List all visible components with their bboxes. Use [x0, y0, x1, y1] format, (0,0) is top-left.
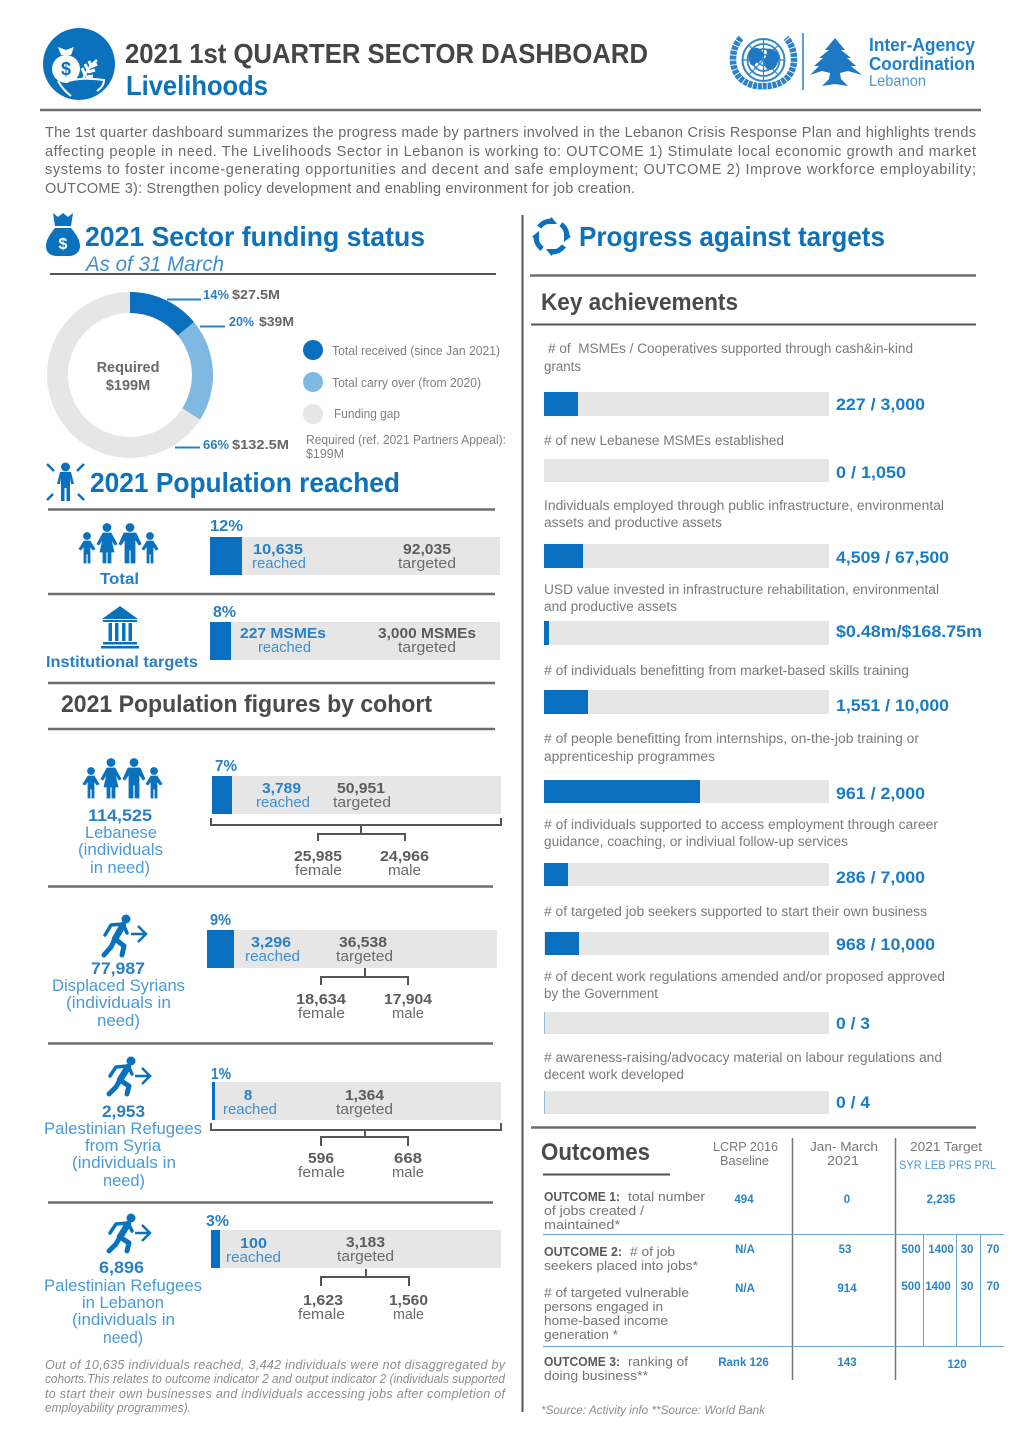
row: institutional targets [46, 604, 500, 671]
subtitle: Livelihoods [126, 70, 268, 101]
panel: lebanese [78, 758, 501, 879]
panel: progress against targets [530, 217, 982, 1114]
indicator: career guidance: 286 / 7,000 [836, 868, 925, 887]
row: outcome 2 home-based income [544, 1281, 999, 1342]
reached [245, 934, 300, 965]
panel: outcomes table [541, 1138, 1004, 1417]
label: Lebanese [85, 823, 157, 842]
percent: 3% [206, 1213, 229, 1230]
targeted: targeted [336, 1101, 393, 1118]
targeted: 92,035 [403, 541, 451, 558]
targeted [337, 1234, 394, 1265]
targeted [333, 780, 391, 811]
indicator: awareness material [544, 1050, 942, 1114]
percent: 8% [213, 604, 236, 621]
targeted: 1,364 [345, 1087, 385, 1104]
heading: progress: Progress against targets [579, 221, 885, 252]
indicator: internships [544, 731, 925, 803]
column header: period: Jan- March [810, 1139, 878, 1154]
row: outcome 2 home-based income: generation * [544, 1328, 618, 1342]
icon: circular arrows [532, 217, 571, 256]
callout: carry over: $39M [259, 314, 294, 329]
footnote: cohorts.This relates to outcome indicator 2 and output indicator 2 (individuals supported [45, 1372, 506, 1386]
callout: carry over: 20% [229, 314, 254, 329]
male [392, 1150, 424, 1181]
icon: money bag: $ [59, 236, 68, 253]
male: male [392, 1005, 424, 1022]
percent: 9% [210, 912, 231, 929]
label: 114,525 [88, 806, 152, 825]
targeted: 36,538 [339, 934, 387, 951]
icon: institution [101, 606, 139, 648]
bracket [321, 1269, 409, 1286]
label: total: Total [100, 571, 139, 588]
column header: target [899, 1139, 997, 1172]
female: female [298, 1306, 345, 1323]
donut centre label: Required [97, 360, 159, 376]
logo text: Lebanon [869, 73, 926, 90]
callout: gap [175, 437, 289, 452]
reached: reached [245, 948, 300, 965]
row: outcome 2 job seekers: N/A [735, 1244, 755, 1256]
panel: palestinian refugees in lebanon [44, 1213, 501, 1347]
row: outcome 2 job seekers: OUTCOME 2: [544, 1245, 622, 1259]
heading: outcomes: Outcomes [541, 1139, 650, 1166]
donut centre label: $199M [106, 378, 150, 394]
indicator: career guidance: guidance, coaching, or indiviual follow-up services [544, 834, 848, 849]
intro text: systems to foster income-generating opportunities and decent and safe employment; OUTCOME 2) Improve workforce employability; [45, 162, 976, 178]
indicator: awareness material: 0 / 4 [836, 1093, 871, 1112]
icon: money bag [46, 213, 80, 256]
row: outcome 2 job seekers: 1400 [928, 1244, 954, 1256]
logo text [869, 35, 975, 90]
indicator: regulations: 0 / 3 [836, 1014, 870, 1033]
reached: 8 [244, 1087, 252, 1104]
indicator: internships: # of people benefitting from internships, on-the-job training or [544, 731, 920, 746]
female: 25,985 [294, 848, 342, 865]
legend: Funding gap [334, 407, 400, 421]
label: (individuals in [72, 1153, 176, 1172]
icon: livelihoods money bag and wheat [43, 28, 115, 100]
icon: person with rays [47, 462, 84, 501]
logo text: Coordination [869, 54, 975, 74]
female: female [298, 1164, 345, 1181]
row: outcome 1: 494 [734, 1194, 754, 1206]
row: outcome 2 home-based income: 500 [901, 1281, 921, 1293]
female [296, 991, 347, 1022]
intro text: OUTCOME 3): Strengthen policy development and enabling environment for job creation. [45, 181, 635, 197]
label: (individuals in [72, 1310, 175, 1329]
label: Palestinian Refugees [44, 1276, 202, 1295]
male: 1,560 [389, 1292, 428, 1309]
indicator: MSME grants: 227 / 3,000 [836, 395, 925, 414]
row: outcome 2 home-based income: home-based income [544, 1314, 668, 1328]
row: outcome 1: OUTCOME 1: [544, 1190, 620, 1204]
label: in Lebanon [82, 1293, 164, 1312]
legend [303, 340, 506, 461]
title: 2021 1st QUARTER SECTOR DASHBOARD [125, 38, 648, 69]
label: in need) [90, 858, 150, 877]
indicator: regulations: # of decent work regulations amended and/or proposed approved [544, 969, 945, 984]
row: outcome 2 home-based income: # of targeted vulnerable [544, 1286, 689, 1300]
indicator: skills training [544, 663, 949, 715]
row: outcome 2 job seekers: # of job [630, 1245, 675, 1259]
male: male [392, 1164, 424, 1181]
reached [223, 1087, 277, 1118]
female: 1,623 [303, 1292, 343, 1309]
label: Palestinian Refugees [44, 1119, 202, 1138]
male [380, 848, 429, 879]
reached: reached [256, 794, 310, 811]
label: institutional targets: Institutional targets [46, 654, 198, 671]
reached: reached [258, 639, 311, 656]
row: outcome 2 job seekers: 70 [987, 1244, 999, 1256]
indicator: USD invested: $0.48m/$168.75m [836, 622, 982, 641]
row: total [79, 518, 500, 588]
indicator: individuals employed: 4,509 / 67,500 [836, 548, 949, 567]
bar [207, 930, 497, 968]
targeted: 50,951 [337, 780, 385, 797]
targeted: targeted [398, 639, 456, 656]
row: outcome 2 home-based income: 30 [961, 1281, 973, 1293]
source note: *Source: Activity info **Source: World Bank [541, 1403, 766, 1417]
female: 596 [308, 1150, 334, 1167]
percent: 12% [210, 518, 243, 535]
targeted: targeted [398, 555, 456, 572]
reached [226, 1235, 281, 1266]
label: need) [97, 1011, 140, 1030]
logo: UN emblem [733, 38, 794, 86]
reached: 100 [240, 1235, 267, 1252]
reached [240, 625, 326, 656]
panel: population reached [46, 462, 500, 671]
reached: reached [252, 555, 306, 572]
indicator: individuals employed [544, 498, 949, 568]
logo text: Inter-Agency [869, 35, 975, 55]
row: outcome 2 home-based income: 914 [837, 1283, 857, 1295]
row: outcome 1: of jobs created / [544, 1204, 645, 1218]
row: outcome 3: Rank 126 [718, 1357, 769, 1369]
indicator: internships: 961 / 2,000 [836, 784, 925, 803]
panel: sector funding status [46, 213, 506, 461]
column header: baseline: Baseline [720, 1153, 769, 1168]
column header: period: 2021 [827, 1153, 859, 1168]
bar [212, 1082, 501, 1120]
male: 668 [394, 1150, 422, 1167]
indicator: individuals employed: Individuals employed through public infrastructure, environmental [544, 498, 944, 513]
donut centre label [97, 360, 159, 394]
percent: 7% [215, 758, 237, 775]
indicator: awareness material: # awareness-raising/advocacy material on labour regulations and [544, 1050, 942, 1065]
callout: received: $27.5M [232, 287, 280, 302]
row: outcome 3: OUTCOME 3: [544, 1355, 620, 1369]
indicator: awareness material: decent work developed [544, 1067, 684, 1082]
targeted: 3,000 MSMEs [378, 625, 476, 642]
reached: 3,296 [251, 934, 291, 951]
icon: running person [109, 1214, 150, 1251]
table grid [543, 1138, 1004, 1380]
female: female [298, 1005, 345, 1022]
reached: reached [223, 1101, 277, 1118]
row: outcome 1: maintained* [544, 1218, 620, 1232]
panel: displaced syrians [52, 912, 497, 1030]
female [294, 848, 342, 879]
footnote: to start their own businesses and individuals accessing jobs after completion of [45, 1387, 507, 1401]
column header: baseline: LCRP 2016 [713, 1139, 778, 1154]
targeted: 3,183 [346, 1234, 385, 1251]
female: 18,634 [296, 991, 347, 1008]
targeted [378, 625, 476, 656]
indicator: USD invested: and productive assets [544, 599, 677, 614]
bracket [211, 1123, 501, 1146]
row: outcome 2 home-based income: persons engaged in [544, 1300, 663, 1314]
footnote: Out of 10,635 individuals reached, 3,442 individuals were not disaggregated by [45, 1358, 506, 1372]
icon: family [79, 524, 158, 563]
label: 6,896 [99, 1258, 144, 1277]
indicator: regulations [544, 969, 945, 1034]
female: female [295, 862, 342, 879]
icon: running person [109, 1056, 150, 1094]
male: 24,966 [380, 848, 429, 865]
targeted [336, 1087, 393, 1118]
label: 77,987 [91, 959, 145, 978]
column header: period [810, 1139, 878, 1168]
label: need) [103, 1171, 145, 1190]
intro text [45, 125, 976, 197]
date label: As of 31 March [84, 253, 224, 276]
targeted: targeted [337, 1248, 394, 1265]
column header: target: SYR LEB PRS PRL [899, 1160, 997, 1172]
label [44, 1102, 202, 1190]
callout: gap: 66% [203, 437, 229, 452]
header [43, 28, 975, 101]
row: outcome 3: 120 [947, 1359, 967, 1371]
callout: received [167, 287, 280, 302]
bracket [211, 818, 501, 841]
reached: reached [226, 1249, 281, 1266]
reached: 10,635 [253, 541, 303, 558]
row: outcome 2 job seekers: seekers placed into jobs* [544, 1259, 698, 1273]
donut chart [58, 292, 213, 448]
column header: target: 2021 Target [910, 1139, 982, 1154]
indicator: MSME grants [544, 341, 925, 416]
indicator: USD invested: USD value invested in infrastructure rehabilitation, environmental [544, 582, 939, 597]
row: outcome 1: 0 [844, 1194, 850, 1206]
male: 17,904 [384, 991, 433, 1008]
label: Displaced Syrians [52, 976, 185, 995]
label: need) [103, 1328, 143, 1347]
bar [212, 776, 501, 814]
row: outcome 3: doing business** [544, 1369, 648, 1383]
row: outcome 2 home-based income: N/A [735, 1283, 755, 1295]
row: outcome 2 home-based income: 70 [987, 1281, 999, 1293]
targeted [398, 541, 456, 572]
label [44, 1258, 202, 1347]
row: outcome 2 job seekers [544, 1244, 999, 1273]
panel: palestinian refugees from syria [44, 1056, 501, 1190]
indicator: own business: 968 / 10,000 [836, 935, 935, 954]
callout: gap: $132.5M [232, 437, 289, 452]
reached: 3,789 [262, 780, 301, 797]
heading: funding: 2021 Sector funding status [85, 221, 425, 252]
reached [256, 780, 310, 811]
row: outcome 3: ranking of [628, 1355, 689, 1369]
intro text: The 1st quarter dashboard summarizes the progress made by partners involved in the Lebanon Crisis Response Plan and highlights trends [45, 125, 976, 141]
bar [210, 622, 500, 660]
male: male [388, 862, 421, 879]
bracket [321, 968, 408, 985]
callout: carry over [200, 314, 294, 329]
row: outcome 2 job seekers: 30 [961, 1244, 973, 1256]
targeted: targeted [336, 948, 393, 965]
legend: Total carry over (from 2020) [332, 376, 481, 390]
indicator: own business [544, 904, 935, 955]
label [52, 959, 185, 1030]
heading: population: 2021 Population reached [90, 467, 400, 498]
intro text: affecting people in need. The Livelihoods Sector in Lebanon is working to: OUTCOME 1) Stimulate local economic growth and market [45, 144, 976, 160]
callout: received: 14% [203, 287, 229, 302]
icon: livelihoods money bag and wheat: $ [61, 59, 71, 79]
indicator: MSME grants: # of MSMEs / Cooperatives supported through cash&in-kind [548, 341, 913, 356]
female [298, 1292, 345, 1323]
heading: population by cohort: 2021 Population figures by cohort [61, 691, 432, 718]
percent: 1% [211, 1066, 231, 1083]
row: outcome 1: 2,235 [927, 1194, 956, 1206]
label: 2,953 [102, 1102, 145, 1121]
indicator: individuals employed: assets and productive assets [544, 515, 722, 530]
row: outcome 1: total number [628, 1190, 705, 1204]
row: outcome 2 job seekers: 500 [901, 1244, 921, 1256]
heading: key achievements: Key achievements [541, 289, 738, 316]
indicator: skills training: 1,551 / 10,000 [836, 696, 949, 715]
indicator: MSME grants: grants [544, 359, 581, 374]
legend: Total received (since Jan 2021) [332, 344, 500, 358]
indicator: new MSMEs: # of new Lebanese MSMEs established [544, 433, 784, 448]
row: outcome 2 job seekers: 53 [839, 1244, 851, 1256]
row: outcome 3: 143 [837, 1357, 857, 1369]
bar [211, 1230, 501, 1268]
column header: baseline [713, 1139, 778, 1168]
label: (individuals in [66, 993, 171, 1012]
targeted [336, 934, 393, 965]
male: male [393, 1306, 424, 1323]
male [389, 1292, 428, 1323]
label: from Syria [85, 1136, 162, 1155]
icon: family [83, 758, 162, 798]
row: outcome 2 home-based income: 1400 [925, 1281, 951, 1293]
indicator: new MSMEs [544, 433, 906, 482]
bar [210, 537, 500, 575]
indicator: career guidance: # of individuals supported to access employment through career [544, 817, 939, 832]
indicator: internships: apprenticeship programmes [544, 749, 715, 764]
legend: Required (ref. 2021 Partners Appeal): [306, 433, 506, 447]
label: (individuals [78, 840, 163, 859]
legend: $199M [306, 447, 344, 461]
row: outcome 3 [544, 1355, 967, 1383]
row: outcome 1 [544, 1190, 956, 1232]
indicator: new MSMEs: 0 / 1,050 [836, 463, 906, 482]
logo: cedar tree [810, 38, 862, 86]
footnote: employability programmes). [45, 1401, 191, 1415]
indicator: regulations: by the Government [544, 986, 658, 1001]
male [384, 991, 433, 1022]
reached [252, 541, 306, 572]
indicator: own business: # of targeted job seekers supported to start their own business [544, 904, 927, 919]
logo divider [802, 33, 804, 90]
reached: 227 MSMEs [240, 625, 326, 642]
indicator: skills training: # of individuals benefitting from market-based skills training [544, 663, 909, 678]
indicator: career guidance [544, 817, 939, 887]
targeted: targeted [333, 794, 391, 811]
female [298, 1150, 345, 1181]
indicator: USD invested [544, 582, 982, 645]
label [78, 806, 163, 877]
footnote [45, 1358, 507, 1415]
icon: running person [104, 914, 146, 955]
